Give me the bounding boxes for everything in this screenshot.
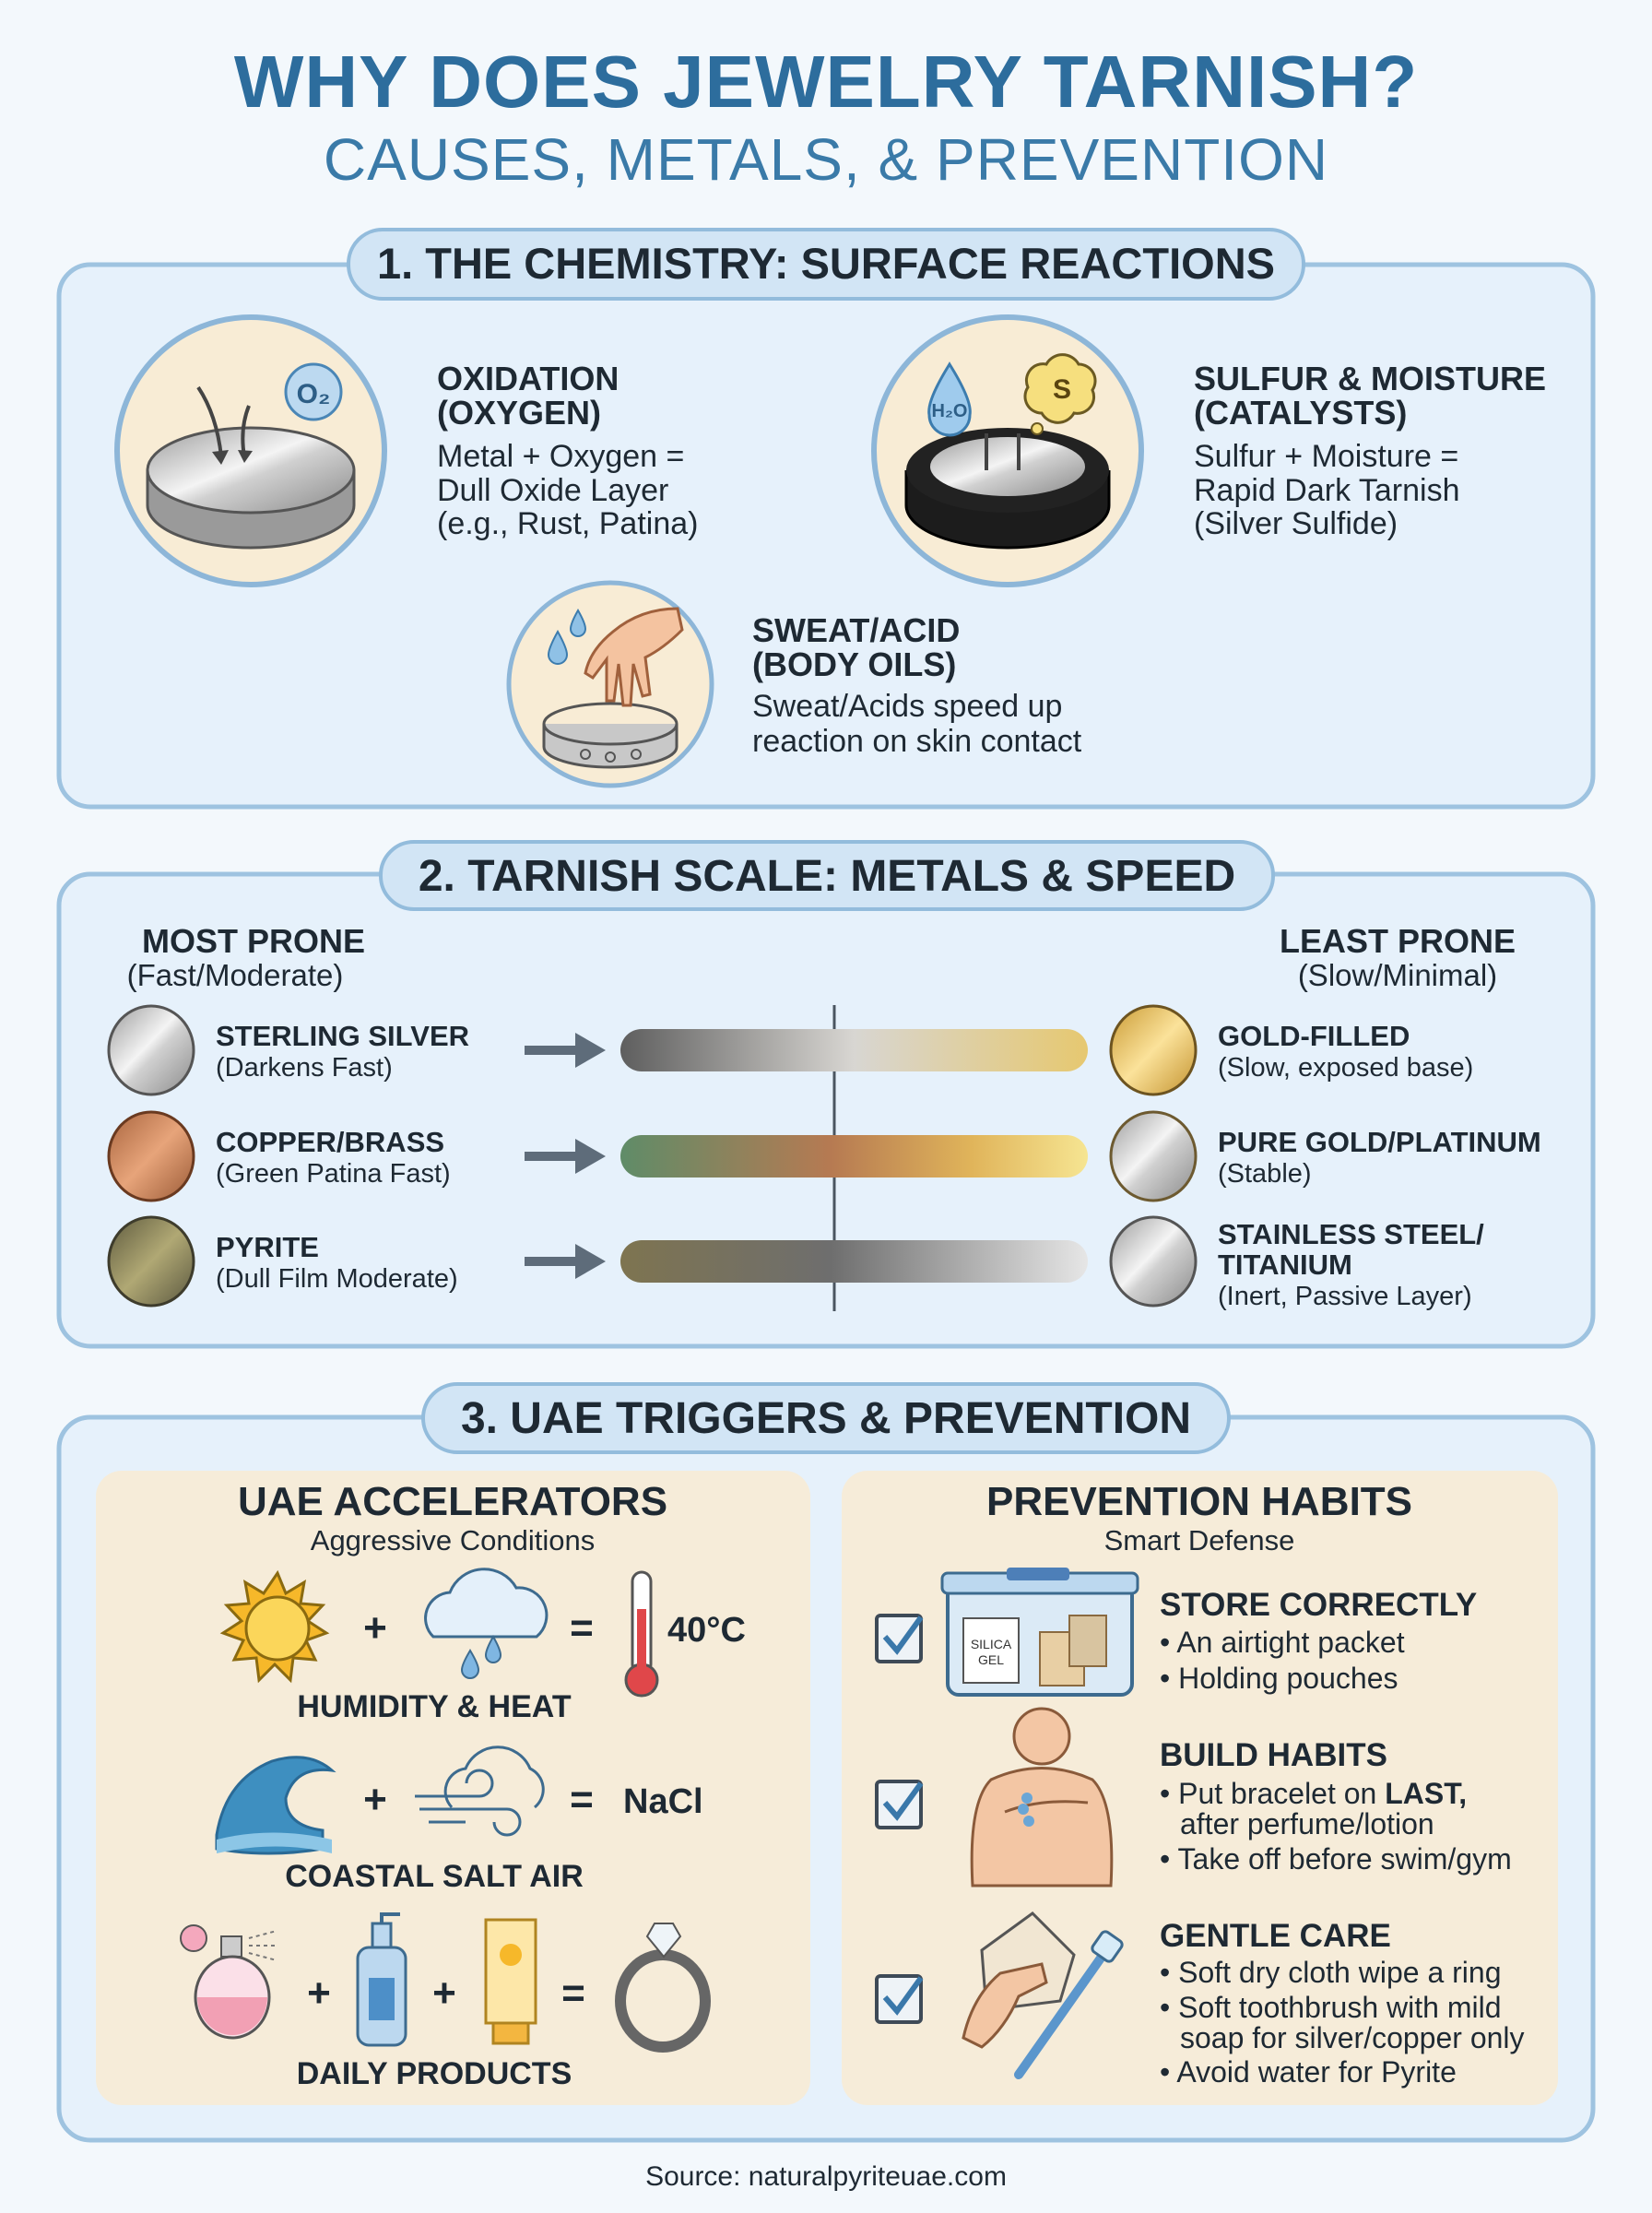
row: pyrite: (Dull Film Moderate) (216, 1264, 458, 1294)
item: gentle care (877, 1913, 1525, 2089)
text: oxidation: Dull Oxide Layer (437, 473, 668, 508)
icon row: humidity & heat: = (570, 1605, 594, 1651)
text: oxidation: (OXYGEN) (437, 394, 601, 432)
item: gentle care: • Avoid water for Pyrite (1160, 2055, 1457, 2089)
text: sweat: SWEAT/ACID (752, 611, 960, 649)
icon row: humidity & heat: HUMIDITY & HEAT (297, 1689, 572, 1724)
text: sulfur: Rapid Dark Tarnish (1194, 473, 1460, 508)
item: store correctly: • Holding pouches (1160, 1662, 1398, 1695)
text: sweat: reaction on skin contact (752, 724, 1082, 759)
label: least prone: LEAST PRONE (1280, 922, 1516, 960)
label: most prone: (Fast/Moderate) (127, 958, 343, 992)
text: sulfur (1194, 360, 1546, 541)
item: gentle care: soap for silver/copper only (1180, 2021, 1525, 2054)
label: most prone (127, 922, 365, 992)
text: sulfur: SULFUR & MOISTURE (1194, 360, 1546, 397)
icon row: coastal salt air: + (363, 1777, 387, 1822)
panel: chemistry (59, 230, 1593, 807)
label: least prone: (Slow/Minimal) (1298, 958, 1497, 992)
text: sulfur: (CATALYSTS) (1194, 394, 1407, 432)
heading: tarnish scale: 2. TARNISH SCALE: METALS & SPEED (419, 852, 1235, 901)
row: pyrite: TITANIUM (1218, 1249, 1352, 1281)
icon row: coastal salt air: = (570, 1777, 594, 1822)
text: sulfur: Sulfur + Moisture = (1194, 439, 1458, 474)
row: copper: PURE GOLD/PLATINUM (1218, 1126, 1541, 1158)
item: build habits: • Put bracelet on LAST, (1160, 1777, 1467, 1810)
row: copper (109, 1112, 1541, 1201)
panel: tarnish scale (59, 842, 1593, 1346)
icon row: daily products: + (432, 1970, 456, 2016)
item: store correctly: STORE CORRECTLY (1160, 1587, 1477, 1623)
heading: triggers: 3. UAE TRIGGERS & PREVENTION (461, 1394, 1191, 1443)
row: copper: (Green Patina Fast) (216, 1159, 451, 1189)
subpanel: prevention: Smart Defense (1104, 1524, 1294, 1556)
heading: tarnish scale (381, 842, 1273, 909)
icon row: daily products: + (307, 1970, 331, 2016)
row: pyrite: (Inert, Passive Layer) (1218, 1282, 1472, 1311)
icon row: humidity & heat (223, 1569, 746, 1724)
heading: chemistry (348, 230, 1304, 299)
row: sterling silver: STERLING SILVER (216, 1020, 469, 1052)
icon row: daily products: = (561, 1970, 585, 2016)
subpanel: prevention (842, 1471, 1558, 2105)
icon row: coastal salt air (217, 1747, 703, 1894)
icon: sweat bracelet (509, 583, 712, 786)
title: WHY DOES JEWELRY TARNISH? (234, 41, 1418, 123)
text: oxidation (437, 360, 698, 541)
text: oxidation: OXIDATION (437, 360, 619, 397)
item: build habits (877, 1709, 1512, 1886)
icon: oxidation disk (117, 317, 384, 585)
label: least prone (1280, 922, 1516, 992)
row: sterling silver (109, 1006, 1473, 1095)
subtitle: CAUSES, METALS, & PREVENTION (324, 126, 1328, 193)
item: store correctly: SILICA (971, 1637, 1012, 1651)
icon: sulfur disk (874, 317, 1141, 585)
item: store correctly: GEL (978, 1652, 1004, 1667)
item: store correctly: • An airtight packet (1160, 1626, 1405, 1659)
item: gentle care: GENTLE CARE (1160, 1918, 1391, 1954)
item: store correctly (877, 1568, 1477, 1695)
item: gentle care: • Soft toothbrush with mild (1160, 1991, 1501, 2024)
item: build habits: BUILD HABITS (1160, 1737, 1387, 1773)
text: sweat: (BODY OILS) (752, 645, 956, 683)
text: sulfur: (Silver Sulfide) (1194, 506, 1398, 541)
row: copper: COPPER/BRASS (216, 1126, 444, 1158)
text: sweat (752, 611, 1082, 759)
subpanel: prevention: PREVENTION HABITS (986, 1479, 1412, 1524)
text: oxidation: Metal + Oxygen = (437, 439, 684, 474)
text: oxidation: (e.g., Rust, Patina) (437, 506, 698, 541)
icon row: humidity & heat: 40°C (667, 1611, 746, 1650)
item: build habits: • Take off before swim/gym (1160, 1842, 1512, 1876)
panel: triggers & prevention (59, 1384, 1593, 2140)
icon row: daily products (181, 1914, 705, 2091)
subpanel: accelerators: UAE ACCELERATORS (238, 1479, 667, 1524)
label: most prone: MOST PRONE (142, 922, 365, 960)
divider line (833, 1005, 835, 1311)
source footer: Source: naturalpyriteuae.com (645, 2161, 1007, 2192)
item: build habits: after perfume/lotion (1180, 1807, 1434, 1840)
item: gentle care: • Soft dry cloth wipe a ring (1160, 1956, 1501, 1989)
row: sterling silver: (Slow, exposed base) (1218, 1053, 1473, 1083)
title (234, 41, 1418, 193)
icon row: coastal salt air: NaCl (623, 1782, 703, 1821)
row: pyrite: STAINLESS STEEL/ (1218, 1218, 1484, 1250)
row: copper: (Stable) (1218, 1159, 1312, 1189)
icon: oxidation disk: O₂ (297, 379, 330, 409)
text: sweat: Sweat/Acids speed up (752, 689, 1062, 724)
icon: sulfur disk: S (1053, 374, 1071, 405)
subpanel: accelerators: Aggressive Conditions (311, 1524, 595, 1556)
row: pyrite (109, 1217, 1484, 1311)
icon row: humidity & heat: + (363, 1605, 387, 1651)
subpanel: accelerators (96, 1471, 810, 2105)
heading: chemistry: 1. THE CHEMISTRY: SURFACE REACTIONS (377, 239, 1275, 288)
icon row: coastal salt air: COASTAL SALT AIR (285, 1859, 584, 1894)
row: sterling silver: GOLD-FILLED (1218, 1020, 1410, 1052)
icon row: daily products: DAILY PRODUCTS (297, 2056, 572, 2091)
row: sterling silver: (Darkens Fast) (216, 1053, 393, 1083)
row: pyrite: PYRITE (216, 1231, 319, 1263)
heading: triggers (423, 1384, 1229, 1452)
icon: sulfur disk: H₂O (932, 401, 967, 421)
